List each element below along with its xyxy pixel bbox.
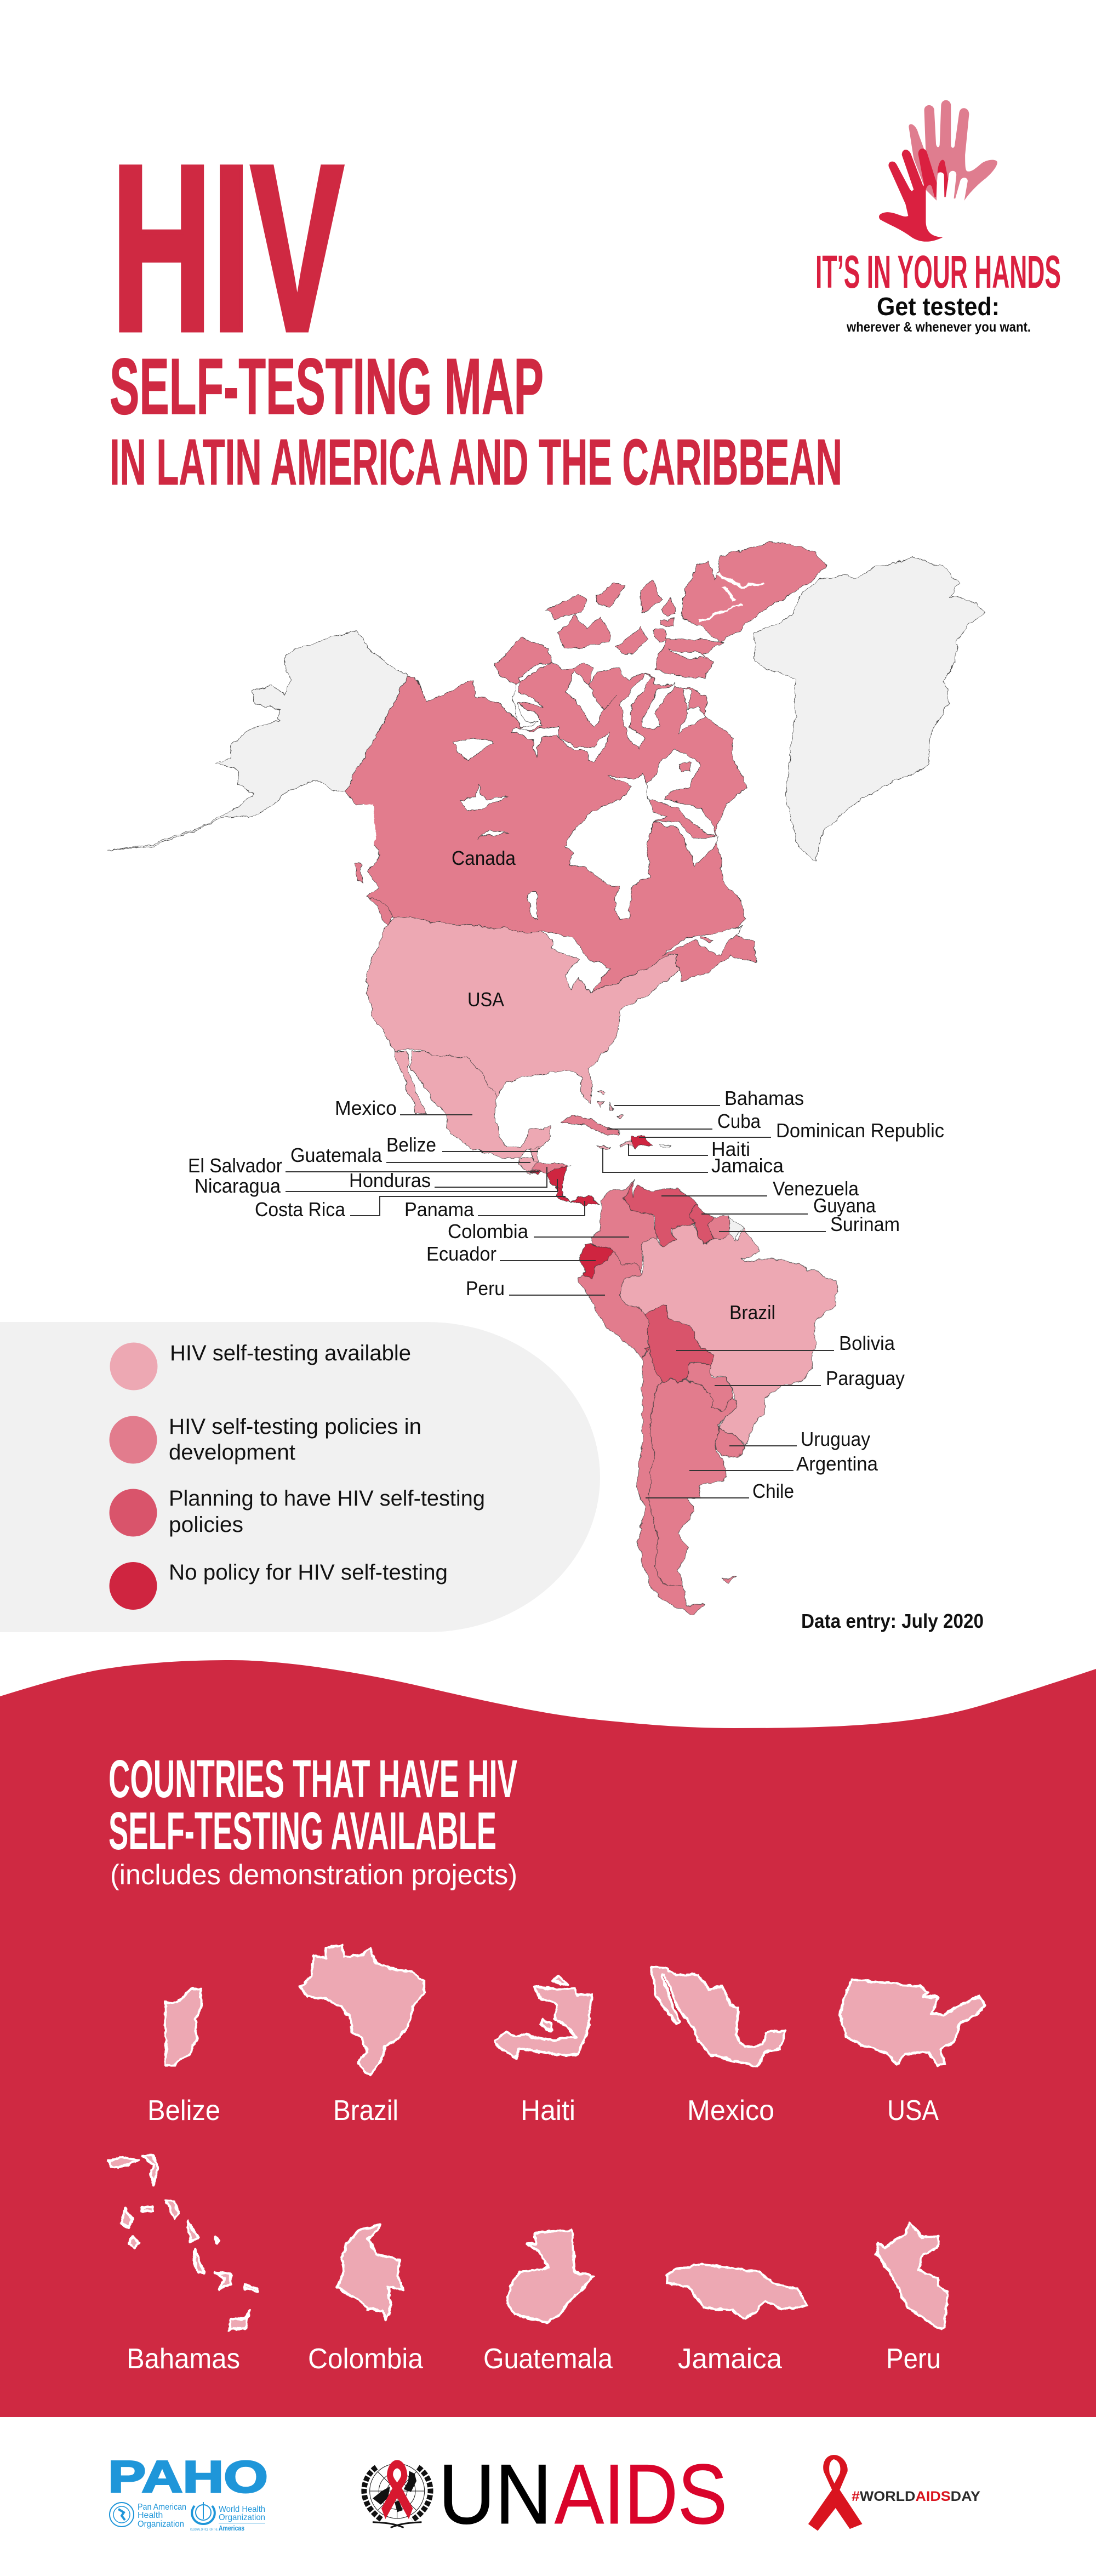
label: Jamaica [603,1148,784,1177]
hashtag: #WORLD AIDSDAY [852,2489,980,2504]
heading line 1: COUNTRIES THAT HAVE HIV [109,1749,517,1809]
WHO name [190,2505,265,2532]
legend item: in development [110,1415,421,1464]
wordmark: AIDS: AIDS [555,2447,727,2541]
label: Haiti: Haiti [711,1138,750,1160]
country: USA [367,917,680,1104]
legend item: in development: development [169,1440,295,1464]
WHO name: World Health [219,2505,265,2514]
legend item: no policy: No policy for HIV self-testing [169,1560,448,1585]
map: Mexico Central America Caribbean [394,1051,670,1206]
label: Bahamas: Bahamas [724,1087,804,1109]
label: Jamaica: Jamaica [711,1154,784,1177]
shape: Bahamas [109,2155,258,2330]
WHO name: Americas [219,2524,244,2532]
country: Peru [578,1252,649,1357]
country: Guyana [690,1203,715,1244]
country: Chile [636,1349,705,1614]
legend item: planning: policies [169,1513,243,1537]
label: Peru: Peru [466,1277,505,1300]
label: Belize: Belize [386,1133,436,1156]
country: Paraguay [686,1363,733,1411]
label: Argentina: Argentina [796,1452,878,1475]
islands: Falklands [721,1576,737,1583]
map labels and leader lines [188,847,944,1502]
country: Cuba [561,1116,620,1137]
label: Guatemala: Guatemala [483,2343,613,2375]
territory: Greenland [754,557,985,860]
label: Surinam: Surinam [830,1213,900,1235]
icon: red ribbon [808,2455,863,2531]
country: Jamaica [597,1146,610,1149]
country: Brazil [620,1222,838,1445]
WHO name: REGIONAL OFFICE FOR THE [190,2528,218,2532]
label: Belize: Belize [147,2095,220,2127]
country: Haiti [619,1141,633,1147]
legend item: planning [110,1486,485,1537]
legend item: planning: Planning to have HIV self-testing [169,1486,485,1511]
country: Panama [569,1196,601,1206]
label: Costa Rica: Costa Rica [255,1198,346,1221]
logo: PAHO [108,2452,268,2532]
country: Uruguay [716,1426,744,1458]
label: Haiti: Haiti [521,2095,575,2127]
legend item: available: HIV self-testing available [170,1341,411,1365]
map: North America [109,541,985,993]
label: Nicaragua [195,1175,557,1197]
map: South America [578,1180,838,1614]
label: Chile: Chile [752,1480,794,1502]
label: Mexico: Mexico [335,1097,397,1119]
label: Colombia: Colombia [308,2343,423,2375]
campaign logo: it's in your hands [815,100,1061,335]
label: Mexico: Mexico [687,2095,774,2127]
shape: Belize [165,1988,201,2065]
label: Peru: Peru [886,2343,941,2375]
data entry note: Data entry: July 2020 [801,1610,984,1632]
logo: UNAIDS [364,2447,727,2541]
legend [110,1341,485,1610]
logo line: wherever and whenever: wherever & whenever you want. [846,320,1031,335]
label: Paraguay: Paraguay [826,1367,905,1389]
label: Haiti [629,1138,750,1160]
panel: legend background [0,1322,600,1632]
island: Puerto Rico [659,1145,670,1148]
PAHO name: Pan American [138,2503,186,2512]
heading note: (includes demonstration projects) [110,1859,517,1891]
label: Nicaragua: Nicaragua [195,1175,281,1197]
label: Ecuador: Ecuador [426,1243,496,1265]
wordmark: UN: UN [438,2447,552,2541]
country: Argentina [649,1378,737,1587]
country: Surinam [708,1216,730,1239]
label: Honduras: Honduras [349,1169,431,1192]
icon: overlapping hands [879,100,997,242]
label: USA: USA [467,988,504,1011]
country: Mexico [411,1051,552,1159]
territory: French Guiana [728,1218,744,1241]
country: Bahamas [597,1091,625,1118]
country: Costa Rica [555,1188,569,1202]
label: Panama: Panama [404,1198,475,1221]
country: Canada [345,541,826,993]
label: Panama [404,1198,585,1221]
Baja California [394,1051,426,1115]
label: Uruguay: Uruguay [801,1428,870,1450]
country: Dominican Republic [632,1136,653,1149]
label: Guatemala: Guatemala [290,1144,383,1166]
country: Honduras [532,1162,570,1175]
legend item: available [110,1341,411,1390]
label: Colombia: Colombia [448,1220,529,1243]
icon: WHO emblem [192,2502,215,2524]
label: Dominican Republic: Dominican Republic [776,1119,944,1142]
shape: Jamaica [667,2265,807,2319]
label: Costa Rica [255,1196,566,1221]
shape: USA [840,1979,985,2065]
PAHO name: Health [138,2511,163,2520]
logo line: get tested: Get tested: [877,292,1000,321]
title: HIV: HIV [111,116,344,380]
country: El Salvador [529,1170,542,1176]
label: Canada: Canada [452,847,516,869]
shape: Brazil [300,1945,424,2076]
title: self-testing map: SELF-TESTING MAP [110,342,544,431]
country: Nicaragua [547,1165,569,1192]
PAHO name [138,2503,186,2529]
label: Honduras [349,1167,547,1192]
shape: Peru [877,2223,948,2330]
country shapes [109,1945,985,2375]
icon: UN emblem with ribbon [364,2460,431,2528]
country: Venezuela [624,1180,696,1247]
PAHO name: Organization [138,2520,184,2529]
label: Brazil: Brazil [729,1301,775,1324]
PAHO wordmark: PAHO [108,2452,268,2502]
label: USA: USA [887,2095,939,2127]
title block [110,116,842,499]
icon: PAHO emblem [110,2503,134,2527]
map: the Americas [109,541,985,1614]
shape: Haiti [495,1976,592,2059]
country: Belize [532,1148,539,1160]
WHO name: Organization [219,2513,265,2522]
label: Cuba: Cuba [717,1110,761,1132]
label: Brazil: Brazil [333,2095,398,2127]
label: Bolivia: Bolivia [839,1332,895,1354]
logo: World AIDS Day [808,2455,980,2531]
label: Bahamas: Bahamas [127,2343,240,2375]
shape: Mexico [652,1967,785,2067]
label: Jamaica: Jamaica [678,2343,782,2375]
label: Venezuela: Venezuela [773,1177,859,1200]
shape: Colombia [336,2225,403,2321]
country: Colombia [591,1180,657,1274]
shape: Guatemala [507,2230,593,2322]
heading line 2: SELF-TESTING AVAILABLE [109,1801,496,1861]
legend item: no policy [110,1560,448,1610]
country: Guatemala [518,1157,538,1173]
country: Bolivia [644,1306,714,1382]
heading: countries available [109,1749,517,1891]
country: Ecuador [580,1244,612,1278]
territory: Alaska [109,631,408,851]
legend item: in development: HIV self-testing policies in [169,1415,421,1439]
label: El Salvador: El Salvador [188,1154,282,1177]
label: Guyana: Guyana [813,1194,876,1217]
panel: red wave section [0,1660,1096,2417]
